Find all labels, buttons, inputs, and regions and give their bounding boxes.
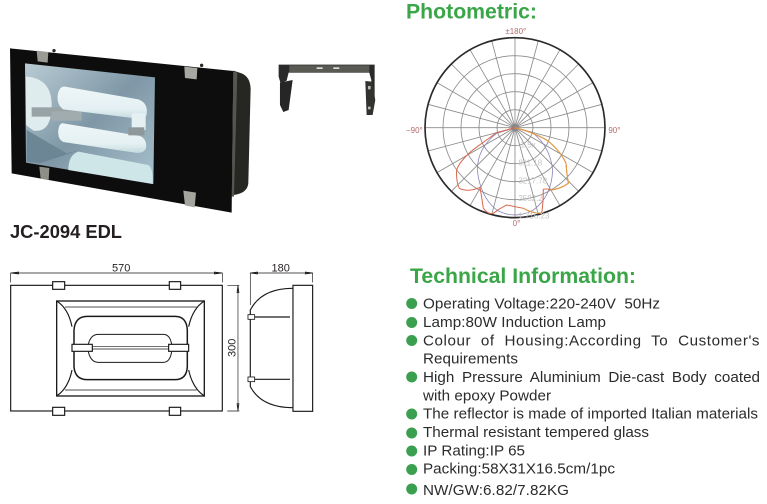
orange curve bbox=[515, 128, 568, 213]
glass window bbox=[25, 63, 155, 184]
fixture front frame bbox=[10, 48, 233, 213]
heading: technical information: Technical Information: bbox=[410, 265, 636, 288]
spec lines: NW/GW:6.82/7.82KG bbox=[423, 482, 569, 499]
spec lines: The reflector is made of imported Italian materials bbox=[423, 406, 758, 422]
dimension lines bbox=[11, 272, 313, 411]
spec lines: Packing:58X31X16.5cm/1pc bbox=[423, 460, 615, 478]
scale labels: 3217.78 bbox=[518, 176, 548, 185]
grid bbox=[425, 38, 605, 218]
polar chart bbox=[406, 27, 620, 228]
front view bbox=[11, 282, 222, 415]
axis labels: ±180° bbox=[505, 27, 526, 36]
bullets bbox=[406, 298, 417, 494]
spec list bbox=[406, 296, 760, 499]
axis labels bbox=[406, 27, 620, 228]
technical drawing bbox=[11, 272, 313, 415]
scale labels: 811.18 bbox=[518, 158, 543, 167]
axis labels: −90° bbox=[406, 126, 423, 135]
dimension labels: 570 bbox=[112, 263, 130, 275]
side view bbox=[248, 285, 313, 411]
lamp interior bbox=[26, 77, 153, 184]
spec lines: with epoxy Powder bbox=[422, 388, 551, 404]
scale labels: 1.715.23 bbox=[518, 211, 550, 220]
spec lines bbox=[422, 296, 760, 499]
dimension labels bbox=[112, 263, 290, 357]
spec lines: IP Rating:IP 65 bbox=[423, 442, 525, 460]
spec lines: Lamp:80W Induction Lamp bbox=[423, 314, 606, 331]
spec lines: High Pressure Aluminium Die-cast Body coated bbox=[423, 369, 760, 386]
heading: photometric: Photometric: bbox=[406, 0, 537, 24]
spec lines: Requirements bbox=[423, 350, 518, 368]
clips bbox=[37, 51, 48, 63]
scale labels: 2582.2 bbox=[518, 194, 543, 203]
model name: JC-2094 EDL bbox=[10, 222, 122, 242]
dimension labels: 300 bbox=[226, 339, 238, 357]
axis labels: 0° bbox=[513, 219, 520, 228]
scale labels: 1.5x bbox=[521, 140, 536, 149]
axis labels: 90° bbox=[608, 126, 620, 135]
dimension labels: 180 bbox=[272, 263, 290, 275]
photo: floodlight fixture bbox=[10, 48, 251, 213]
photo: mounting bracket bbox=[279, 65, 375, 115]
blue curve bbox=[477, 128, 553, 215]
spec lines: Operating Voltage:220-240V 50Hz bbox=[423, 296, 660, 312]
spec lines: Colour of Housing:According To Customer's bbox=[423, 332, 760, 350]
scale labels bbox=[518, 140, 550, 220]
spec lines: Thermal resistant tempered glass bbox=[423, 424, 649, 441]
fixture body side bbox=[233, 71, 251, 195]
red curve bbox=[457, 128, 568, 214]
